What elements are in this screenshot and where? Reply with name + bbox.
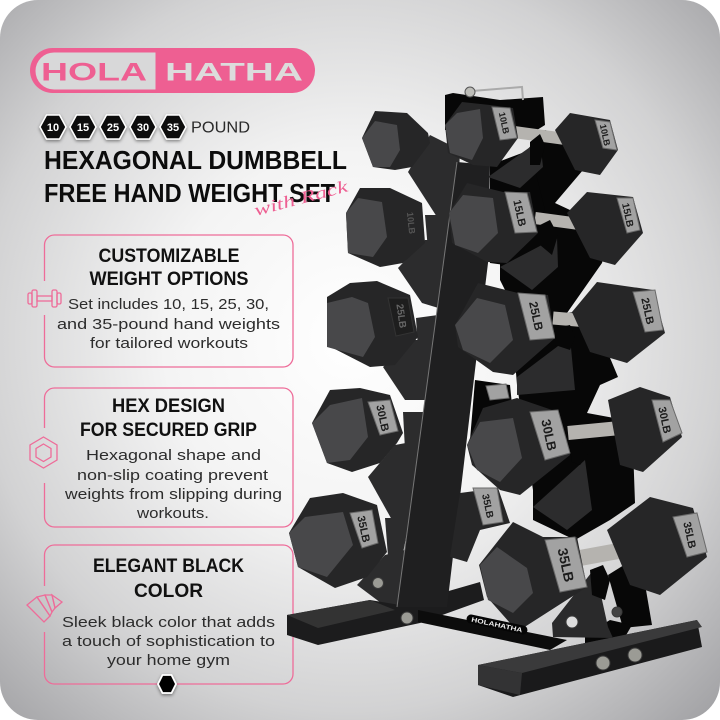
icon: hexagon xyxy=(30,437,57,468)
body text: for tailored workouts xyxy=(90,335,248,352)
dumbbell: left 15 lb xyxy=(346,188,425,267)
panel: customizable weight options xyxy=(28,235,293,367)
dumbbell: rear 35 lb: 35LB xyxy=(479,493,495,519)
badge 10 xyxy=(40,115,66,139)
badge 15 xyxy=(70,115,96,139)
body text: Sleek black color that adds xyxy=(62,614,275,631)
dumbbell rack product photo xyxy=(287,87,707,697)
heading: CUSTOMIZABLE xyxy=(98,245,240,267)
heading: ELEGANT BLACK xyxy=(93,555,244,577)
icon: colour swatch fan xyxy=(27,595,62,622)
body text: Set includes 10, 15, 25, 30, xyxy=(68,296,269,313)
dumbbell: front 15 lb xyxy=(449,183,643,265)
dumbbell: left 10 lb xyxy=(362,111,430,170)
rack top bracket xyxy=(445,87,545,130)
badge 30: 30 xyxy=(137,122,149,134)
dumbbell: rear 30 lb tag xyxy=(486,384,509,400)
dumbbell: front 10 lb: 10LB xyxy=(598,123,612,147)
dumbbell: front 30 lb: 30LB xyxy=(655,406,673,435)
panel: hex design xyxy=(30,388,293,527)
brand logo: HOLA xyxy=(41,58,147,86)
panel: elegant black color xyxy=(27,545,293,684)
body text: your home gym xyxy=(107,652,230,669)
badge 30 xyxy=(130,115,156,139)
dumbbell: front 30 lb xyxy=(467,387,682,495)
dumbbell: front 35 lb: 35LB xyxy=(555,547,577,583)
title: HEXAGONAL DUMBBELL xyxy=(44,145,347,175)
rack black right frame xyxy=(470,130,652,650)
badge 35 xyxy=(160,115,186,139)
body text: weights from slipping during xyxy=(64,486,282,503)
weight hexagon badges xyxy=(40,115,186,139)
dumbbell: left 35 lb xyxy=(289,493,387,588)
dumbbell: left 25 lb xyxy=(327,281,418,367)
bottom hexagon marker xyxy=(158,675,176,693)
dumbbell: front 35 lb: 35LB xyxy=(680,521,698,550)
body text: and 35-pound hand weights xyxy=(57,316,280,333)
body text xyxy=(57,296,280,352)
heading: HEX DESIGN xyxy=(112,395,225,417)
rack centre column xyxy=(397,162,490,607)
dumbbell: front 10 lb: 10LB xyxy=(497,111,511,135)
dumbbell: left 35 lb: 35LB xyxy=(354,515,372,544)
rack mini logo: HOLAHATHA xyxy=(471,617,523,634)
heading xyxy=(93,555,244,602)
rack mini logo xyxy=(466,614,528,635)
title: FREE HAND WEIGHT SET xyxy=(44,178,335,208)
rack gray right plates xyxy=(488,140,592,530)
heading: WEIGHT OPTIONS xyxy=(90,268,248,290)
title xyxy=(44,145,347,208)
brand logo: HATHA xyxy=(165,58,303,86)
dumbbell: left 15 lb: 10LB xyxy=(405,212,417,235)
dumbbell: front 30 lb: 30LB xyxy=(538,418,560,452)
dumbbell: front 10 lb xyxy=(445,102,618,175)
dumbbell: front 35 lb xyxy=(479,497,707,628)
dumbbell: left 30 lb: 30LB xyxy=(373,404,391,433)
badge 10: 10 xyxy=(47,122,59,134)
body text: non-slip coating prevent xyxy=(77,467,269,484)
rack rear arms and handles xyxy=(357,135,460,608)
icon: dumbbell xyxy=(28,290,61,307)
script subtitle: with Rack xyxy=(252,176,350,220)
body text: workouts. xyxy=(136,505,209,522)
heading xyxy=(90,245,248,290)
heading: COLOR xyxy=(134,580,203,602)
body text: Hexagonal shape and xyxy=(86,447,261,464)
body text xyxy=(64,447,282,522)
dumbbell: front 15 lb: 15LB xyxy=(619,202,635,228)
dumbbell: left 25 lb: 25LB xyxy=(393,303,408,329)
dumbbell: front 15 lb: 15LB xyxy=(510,199,528,228)
rack base xyxy=(287,568,702,697)
badge 35: 35 xyxy=(167,122,179,134)
badge 25 xyxy=(100,115,126,139)
heading: FOR SECURED GRIP xyxy=(80,419,257,441)
badge 25: 25 xyxy=(107,122,119,134)
badge 15: 15 xyxy=(77,122,89,134)
rack bolts xyxy=(372,578,642,670)
heading xyxy=(80,395,257,441)
dumbbell: rear 35 lb xyxy=(450,488,510,562)
dumbbell: front 25 lb xyxy=(455,282,665,375)
pound label: POUND xyxy=(191,120,250,136)
dumbbell: left 30 lb xyxy=(312,388,403,472)
dumbbell: front 25 lb: 25LB xyxy=(638,297,656,326)
dumbbell: front 25 lb: 25LB xyxy=(526,300,546,332)
body text xyxy=(62,614,275,669)
body text: a touch of sophistication to xyxy=(62,633,275,650)
brand logo xyxy=(30,48,315,93)
